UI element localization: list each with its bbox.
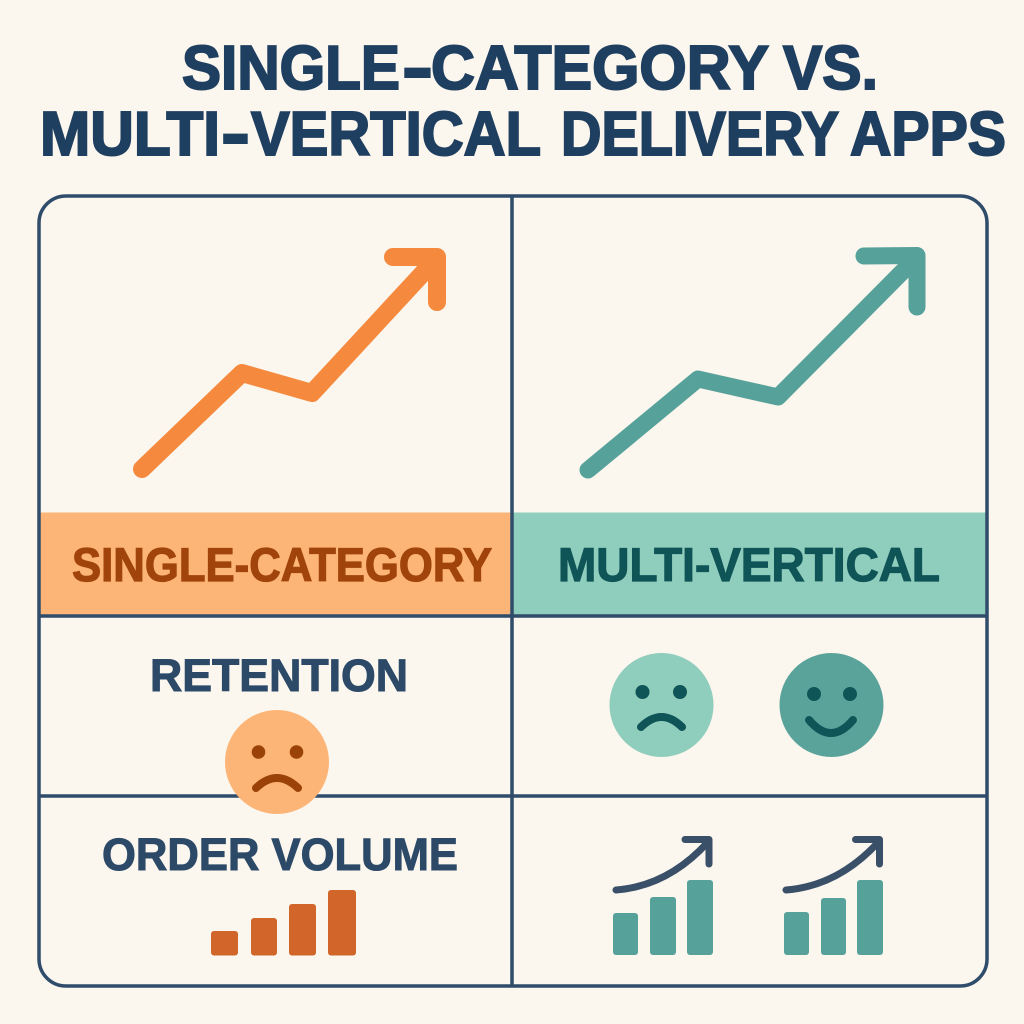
title: VS. (783, 34, 878, 103)
bar chart: multi-vertical order volume A (613, 840, 713, 955)
icon: sad face orange (225, 710, 329, 814)
title: MULTI (40, 100, 220, 169)
title: - (222, 100, 249, 169)
panel: single-category header band: SINGLE-CATEGORY (72, 538, 492, 591)
icon: sad face teal (610, 653, 714, 757)
chart: multi-vertical growth arrow (588, 256, 917, 470)
chart: single-category growth arrow (142, 257, 437, 469)
title: - (403, 34, 432, 103)
title: SINGLE (182, 34, 400, 103)
bar chart: single-category order volume (211, 890, 356, 956)
heading: order volume: ORDER VOLUME (102, 829, 458, 880)
trend arrow B (786, 840, 880, 890)
bar chart: multi-vertical order volume B (784, 840, 883, 955)
comparison table grid (39, 196, 987, 986)
trend arrow A (616, 840, 709, 890)
title: DELIVERY (561, 100, 839, 169)
title: CATEGORY (431, 34, 769, 103)
icon: happy face teal (780, 653, 884, 757)
panel: multi-vertical header band: MULTI-VERTICAL (558, 538, 940, 591)
title: APPS (850, 100, 1006, 169)
title (40, 34, 1006, 169)
heading: retention: RETENTION (150, 650, 408, 701)
panel: single-category header band (40, 512, 512, 616)
panel: multi-vertical header band (512, 512, 986, 616)
title: VERTICAL (251, 100, 541, 169)
